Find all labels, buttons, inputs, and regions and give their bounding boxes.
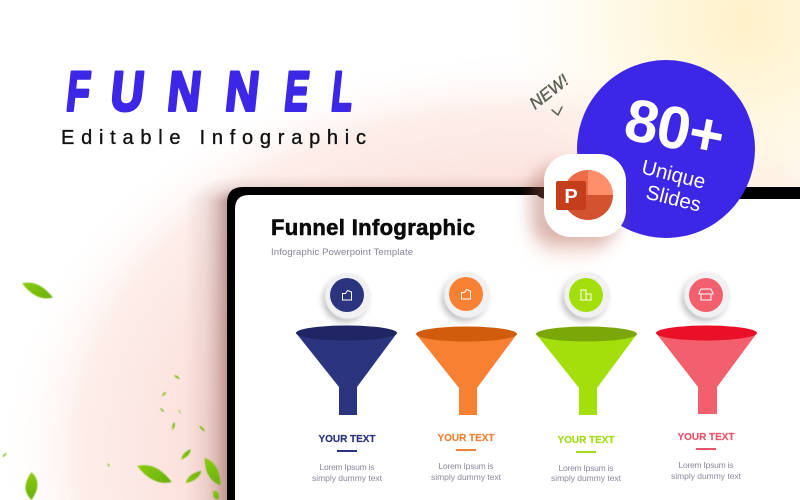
label orange (431, 433, 502, 482)
label red (671, 432, 742, 481)
label red: Lorem Ipsum is (678, 460, 734, 470)
label orange: Lorem Ipsum is (438, 461, 494, 471)
icon: PowerPoint tile: P (564, 186, 578, 208)
sub heading: Infographic Powerpoint Template (271, 247, 413, 258)
label red: simply dummy text (671, 471, 742, 481)
leaf mid (184, 468, 203, 486)
subtitle: Editable Infographic: Editable Infographic (61, 127, 366, 149)
title: FUNNEL: N (223, 60, 262, 122)
funnel column: navy (296, 273, 397, 483)
label orange: simply dummy text (431, 472, 502, 482)
icon badge green (562, 272, 610, 321)
leaf left bottom (26, 472, 38, 500)
icon: PowerPoint tile (530, 154, 626, 245)
funnel column: orange (416, 272, 517, 482)
label navy: Lorem Ipsum is (320, 462, 374, 472)
icon badge orange (442, 272, 490, 321)
funnel navy (296, 326, 397, 415)
badge: 80+ unique slides: Unique (639, 156, 708, 194)
title: FUNNEL: F (64, 60, 93, 122)
label orange: YOUR TEXT (438, 433, 494, 444)
label green: Lorem Ipsum is (558, 463, 614, 473)
badge: 80+ unique slides: Slides (644, 181, 703, 217)
label green (551, 435, 622, 483)
title: FUNNEL (64, 60, 356, 122)
label: NEW!: NEW! (526, 71, 573, 113)
label green: YOUR TEXT (558, 435, 614, 446)
leaf right tall (200, 455, 225, 488)
title: FUNNEL: U (108, 60, 147, 122)
falling leaves (2, 278, 225, 500)
label navy (312, 434, 383, 483)
funnel column: green (536, 272, 637, 483)
funnel column: red (656, 272, 757, 481)
heading: Funnel Infographic: Funnel Infographic (271, 215, 475, 240)
label navy: YOUR TEXT (318, 434, 376, 445)
title: FUNNEL: E (282, 60, 312, 122)
screen soft tint near badge (530, 218, 610, 262)
leaf small mid (180, 448, 192, 461)
leaf bottom edge (211, 489, 221, 500)
icon badge red (682, 272, 730, 321)
tiny leaf cluster (2, 374, 206, 467)
laptop frame (227, 187, 800, 500)
funnel red (656, 326, 757, 414)
leaf large top (20, 278, 55, 303)
icon badge navy (323, 273, 371, 322)
funnel orange (416, 326, 517, 415)
badge: 80+ unique slides (577, 60, 755, 238)
leaf large bottom (135, 461, 174, 487)
label red: YOUR TEXT (678, 432, 734, 443)
title: FUNNEL: N (165, 60, 204, 122)
funnel green (536, 326, 637, 415)
label navy: simply dummy text (312, 473, 383, 483)
badge: 80+ unique slides: 80+ (619, 85, 730, 170)
label green: simply dummy text (551, 473, 622, 483)
title: FUNNEL: L (329, 60, 356, 122)
